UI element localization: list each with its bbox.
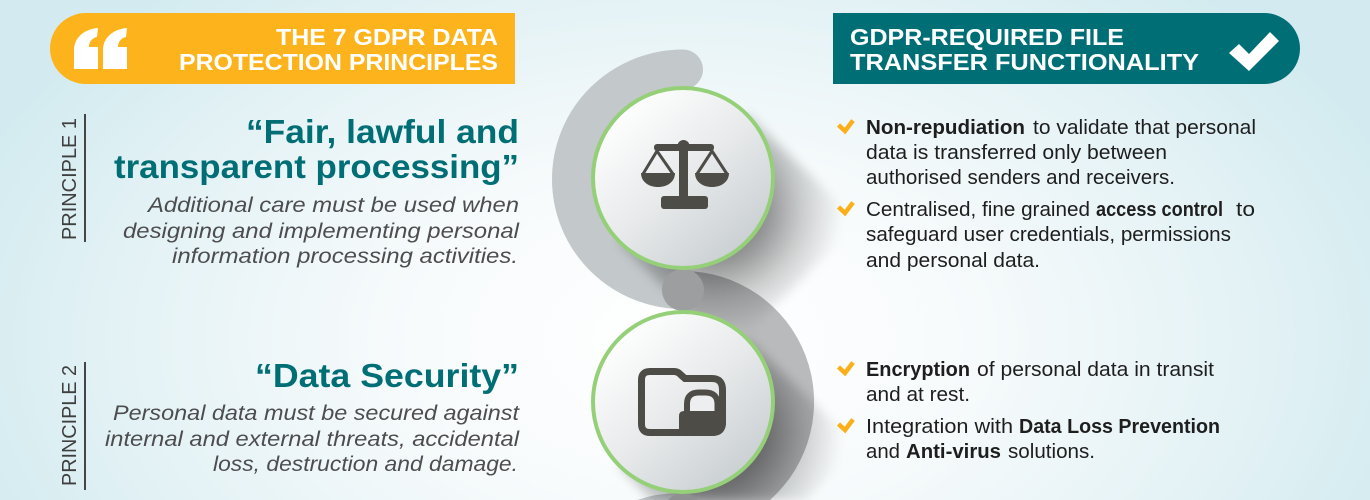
integration item: solutions. xyxy=(1008,441,1095,463)
principle 1 disc xyxy=(593,88,858,353)
icon: orange check xyxy=(838,202,853,213)
icon: scales of justice xyxy=(641,140,729,209)
principle 1 title: “Fair, lawful and xyxy=(246,113,519,150)
principle 2 description xyxy=(105,402,521,476)
encryption item: of personal data in transit xyxy=(977,359,1214,381)
integration item: and xyxy=(866,441,900,463)
banner heading: functionality: GDPR-REQUIRED FILE xyxy=(850,24,1124,50)
principle 1 description: information processing activities. xyxy=(172,245,518,268)
access control item xyxy=(866,199,1255,272)
integration item: Integration with xyxy=(866,416,1013,438)
icon: white check mark xyxy=(1229,32,1279,71)
principle 1 description: Additional care must be used when xyxy=(146,194,519,217)
banner heading: functionality xyxy=(850,24,1199,75)
principle 1 label: PRINCIPLE 1 xyxy=(59,118,81,240)
principle 1 title xyxy=(114,113,519,185)
non-repudiation item: Non-repudiation xyxy=(866,117,1025,139)
principle 2 disc xyxy=(593,312,858,500)
banner heading: principles: PROTECTION PRINCIPLES xyxy=(179,49,498,75)
principle 2 description: loss, destruction and damage. xyxy=(213,453,518,476)
non-repudiation item: to validate that personal xyxy=(1033,117,1256,139)
banner heading: functionality: TRANSFER FUNCTIONALITY xyxy=(850,49,1199,75)
non-repudiation item xyxy=(866,117,1256,189)
access control item: safeguard user credentials, permissions xyxy=(866,224,1231,246)
principle 2 title: “Data Security” xyxy=(255,357,519,394)
encryption item: Encryption xyxy=(866,359,970,381)
principle 2 description: internal and external threats, accidental xyxy=(105,428,521,451)
non-repudiation item: authorised senders and receivers. xyxy=(866,167,1175,189)
encryption item: and at rest. xyxy=(866,384,970,406)
icon: orange check xyxy=(838,420,853,430)
principle 1 description xyxy=(123,194,521,268)
principle 1 description: designing and implementing personal xyxy=(123,220,521,243)
integration item: Anti-virus xyxy=(906,441,1001,463)
functionality list: principle 1 xyxy=(838,117,1256,272)
non-repudiation item: data is transferred only between xyxy=(866,142,1167,164)
banner heading: principles xyxy=(179,24,498,75)
access control item: to xyxy=(1236,199,1255,221)
icon: opening quotation mark xyxy=(74,28,127,69)
encryption item xyxy=(866,359,1214,406)
access control item: Centralised, fine grained xyxy=(866,199,1090,221)
panel: principles banner xyxy=(50,13,515,84)
banner heading: principles: THE 7 GDPR DATA xyxy=(276,24,498,50)
integration item: Data Loss Prevention xyxy=(1019,416,1220,438)
central S-curve timeline xyxy=(572,70,814,500)
integration item xyxy=(866,416,1220,463)
principle 2 description: Personal data must be secured against xyxy=(113,402,520,425)
principle 1 title: transparent processing” xyxy=(114,148,519,185)
principle 2 label: PRINCIPLE 2 xyxy=(59,365,81,486)
icon: folder with padlock xyxy=(642,372,726,436)
panel: functionality banner xyxy=(833,13,1300,84)
functionality list: principle 2 xyxy=(838,359,1220,463)
icon: orange check xyxy=(838,362,853,373)
access control item: access control xyxy=(1096,199,1223,221)
icon: orange check xyxy=(838,120,853,131)
access control item: and personal data. xyxy=(866,250,1040,272)
